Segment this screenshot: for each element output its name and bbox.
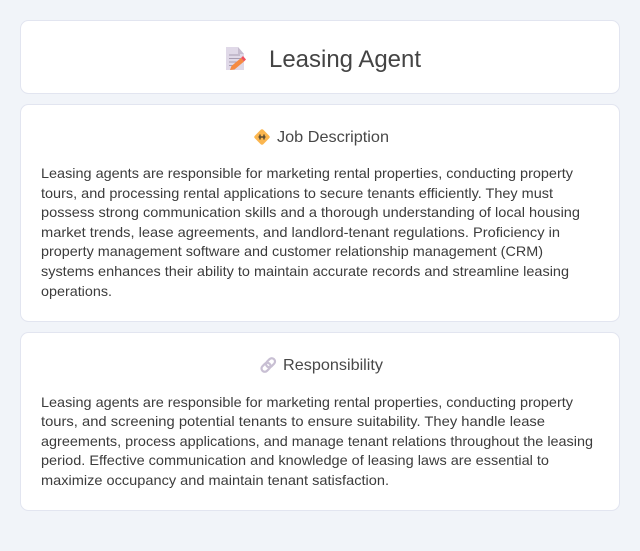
- heading: Responsibility: Responsibility: [283, 357, 383, 374]
- text block: responsibility: agreements, process applications, and manage tenant relations throughout the leasing: [41, 433, 593, 449]
- panel: job description: [20, 104, 620, 322]
- text block: responsibility: Leasing agents are responsible for marketing rental properties, conducting property: [41, 394, 573, 410]
- text block: job description: [41, 165, 580, 299]
- text block: responsibility: period. Effective communication and knowledge of leasing laws are essential to: [41, 452, 549, 468]
- text block: responsibility: tours, and screening potential tenants to ensure suitability. They handle lease: [41, 413, 545, 429]
- panel: title: [20, 20, 620, 94]
- heading: Job Description: Job Description: [277, 129, 389, 146]
- text block: job description: market trends, lease agreements, and landlord-tenant regulations. Proficiency in: [41, 224, 560, 240]
- heading: Leasing Agent: Leasing Agent: [269, 46, 421, 73]
- text block: responsibility: [41, 394, 593, 488]
- icon: document with pencil: [226, 47, 246, 70]
- text block: responsibility: maximize occupancy and maintain tenant satisfaction.: [41, 472, 389, 488]
- text block: job description: property management software and customer relationship management (CRM): [41, 243, 543, 259]
- text block: job description: Leasing agents are responsible for marketing rental properties, conducting property: [41, 165, 573, 181]
- panel: responsibility: [20, 332, 620, 510]
- text block: job description: systems enhances their ability to maintain accurate records and streamline leasing: [41, 263, 569, 279]
- text block: job description: tours, and processing rental applications to secure tenants efficiently. They must: [41, 185, 553, 201]
- text block: job description: possess strong communication skills and a thorough understanding of local housing: [41, 204, 580, 220]
- text block: job description: operations.: [41, 283, 112, 299]
- icon: chain link: [260, 357, 276, 373]
- icon: construction diamond: [254, 129, 270, 145]
